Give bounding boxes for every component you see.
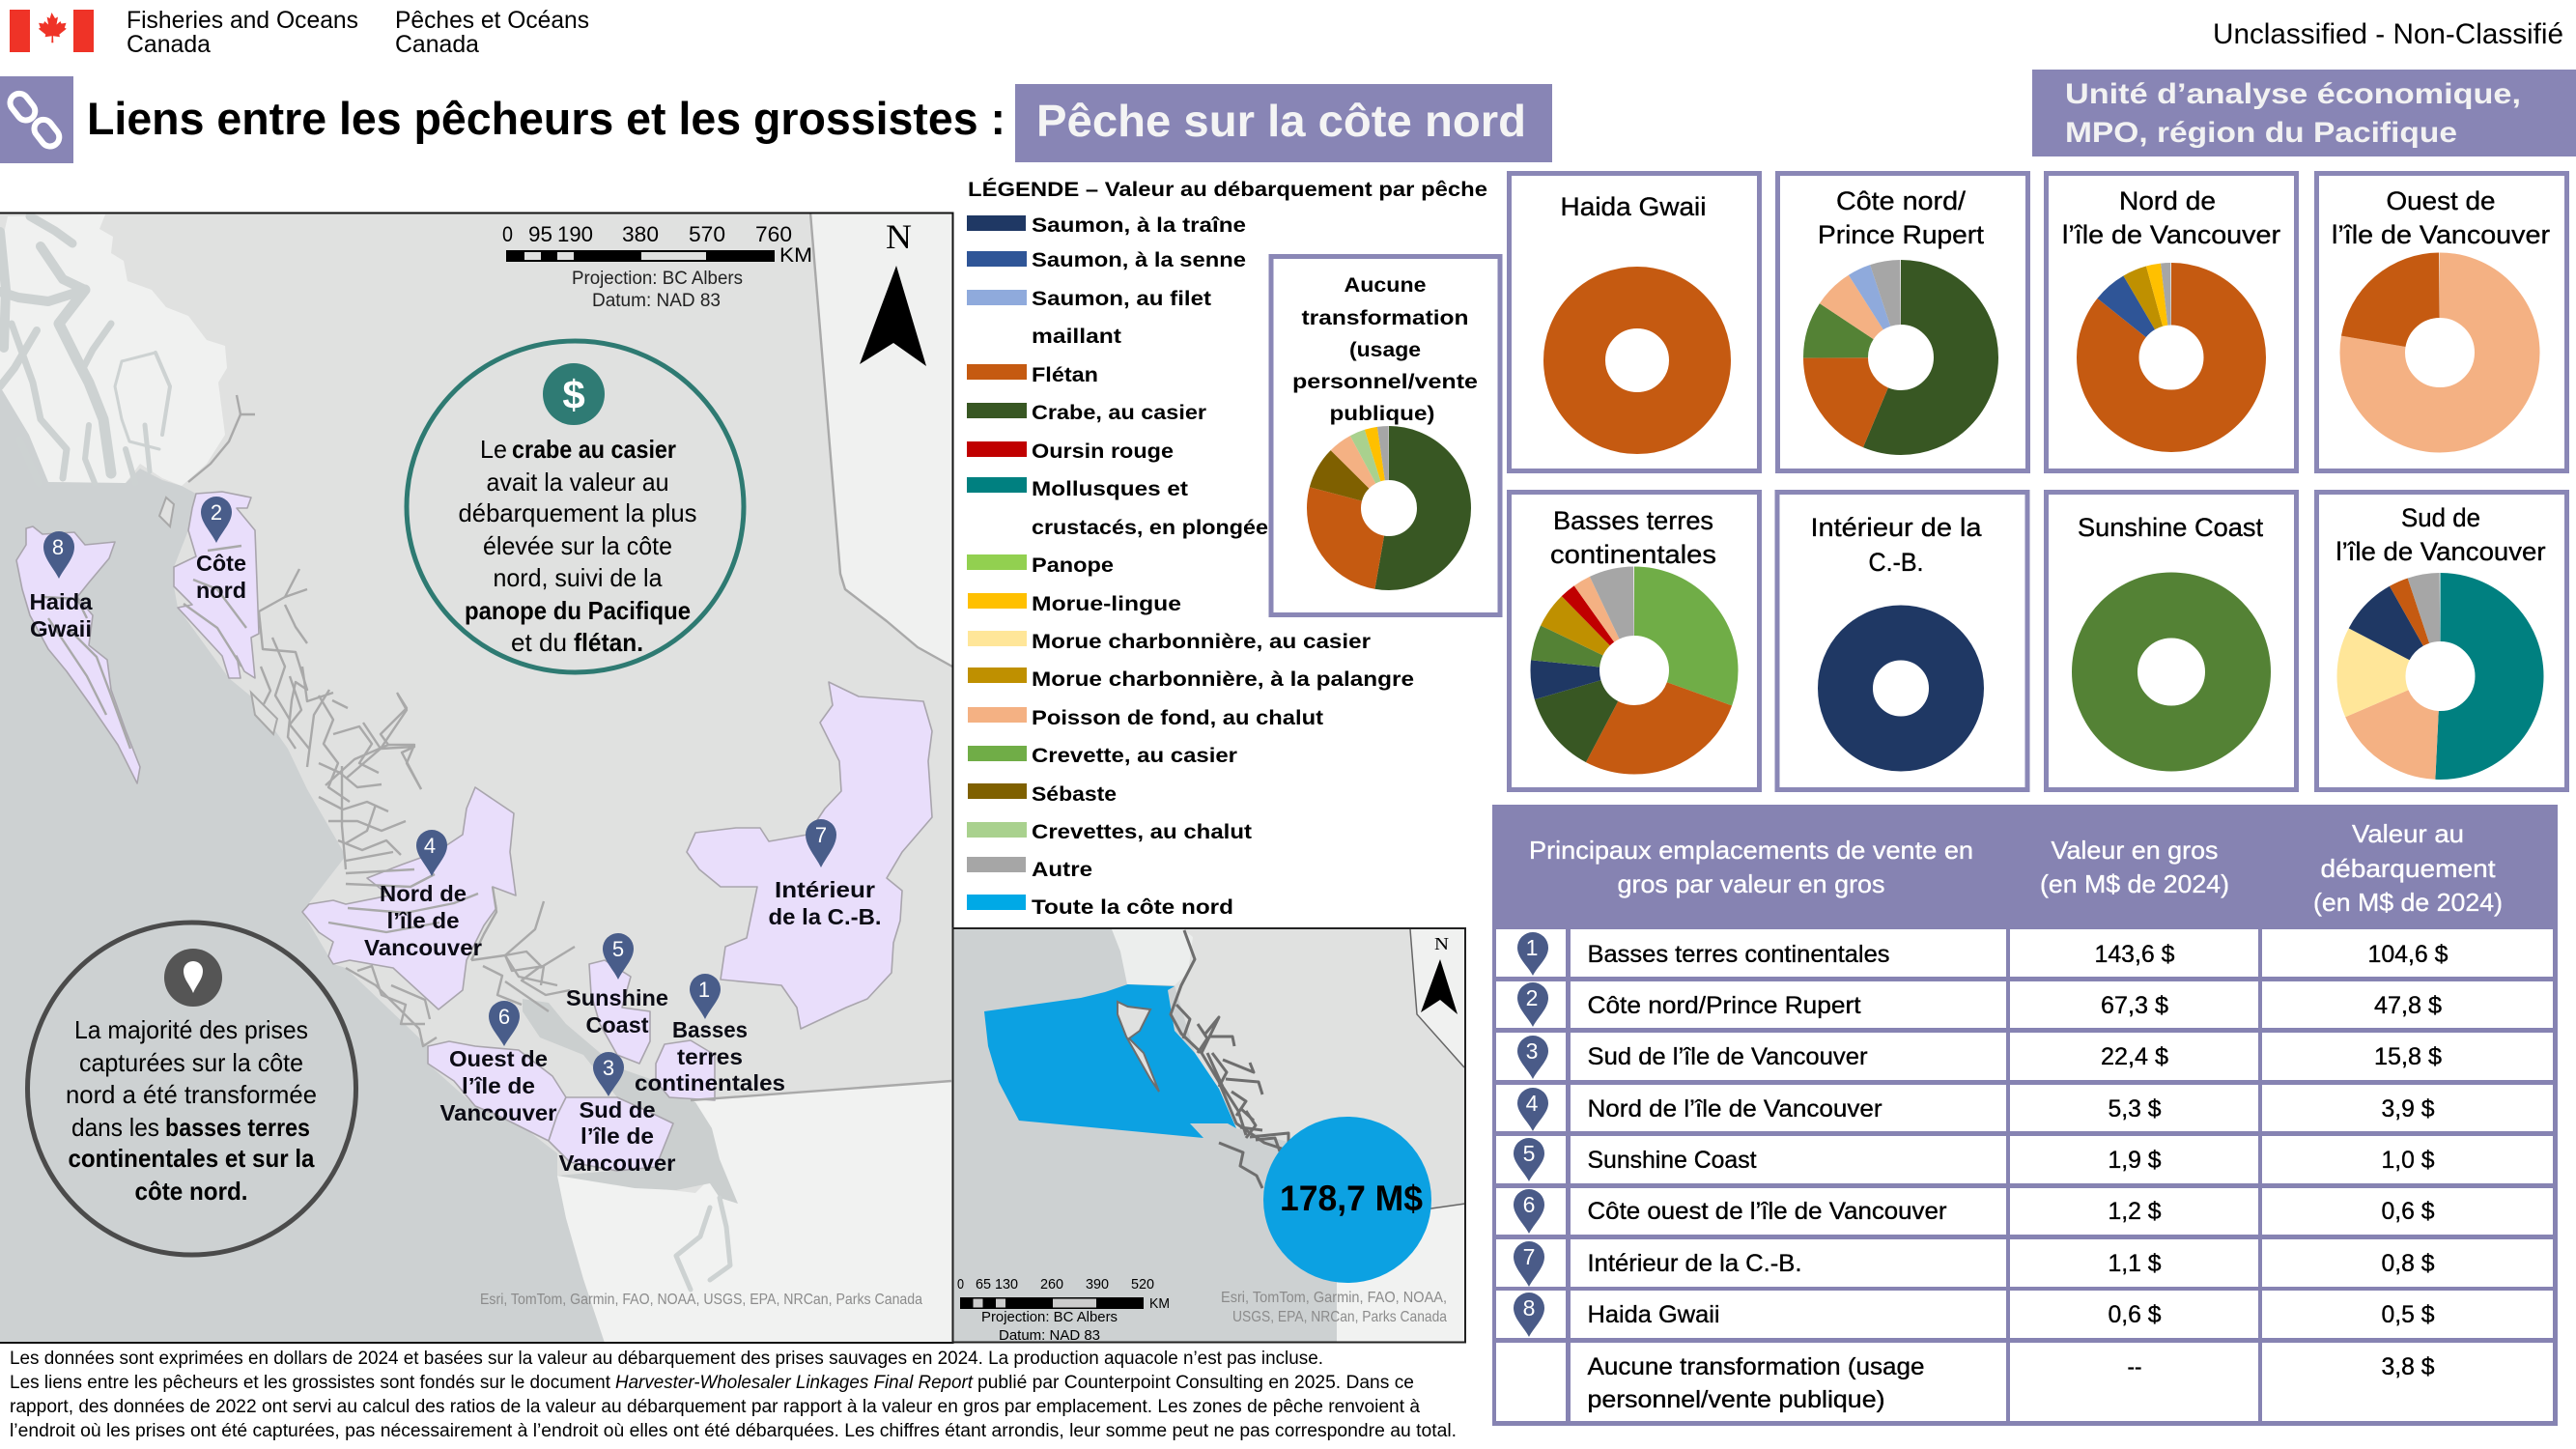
- legend items: Crevette, au casier: [1032, 745, 1237, 767]
- region: Nord de l'île de Vancouver: [302, 787, 516, 1009]
- callout: processing location: basses terres: [165, 1113, 310, 1142]
- subtitle badge: Pêche sur la côte nord: [1036, 96, 1526, 146]
- header: government of Canada signature: Canada: [395, 31, 479, 58]
- row 9: 3,8 $: [2382, 1353, 2435, 1380]
- north arrow: N: [886, 217, 912, 256]
- inset: northern light land: [1112, 929, 1193, 985]
- row 5: 1,9 $: [2108, 1147, 2162, 1174]
- row 2: 67,3 $: [2101, 992, 2168, 1019]
- table header: Principaux emplacements de vente en: [1529, 836, 1973, 865]
- callout: total value: 178,7 M$: [1280, 1179, 1423, 1218]
- inset scale bar: 520: [1131, 1276, 1154, 1293]
- panel: pie Sud de l'île de Vancouver: l’île de Vancouver: [2335, 537, 2546, 566]
- header: government of Canada signature: Pêches et Océans: [395, 7, 589, 34]
- inset scale bar: 0: [957, 1276, 964, 1293]
- inset scale bar: KM: [1149, 1295, 1170, 1312]
- row 1: Basses terres continentales: [1588, 941, 1889, 968]
- row 1: 1: [1526, 935, 1538, 960]
- donut chart: [2372, 285, 2507, 420]
- pin 5 Sunshine Coast: [566, 933, 668, 1037]
- callout: processing location: côte nord.: [135, 1177, 247, 1206]
- inset scale bar: 65: [976, 1276, 991, 1293]
- callout: highest landed value: crabe au casier: [512, 435, 676, 464]
- panel: pie Nord de l'île de Vancouver: l’île de Vancouver: [2062, 220, 2280, 249]
- panel: pie Ouest de l'île de Vancouver: Ouest de: [2386, 186, 2496, 215]
- panel: pie Nord de l'île de Vancouver: Nord de: [2119, 186, 2216, 215]
- legend items: Saumon, à la traîne: [1032, 214, 1246, 237]
- callout: highest landed value: [407, 341, 744, 672]
- callout: total value: [1263, 1117, 1431, 1283]
- legend items: Poisson de fond, au chalut: [1032, 707, 1323, 729]
- row 2: Côte nord/Prince Rupert: [1588, 992, 1861, 1019]
- callout: processing location: continentales et sur la: [68, 1144, 315, 1173]
- inset: Haida Gwaii: [1118, 1002, 1159, 1092]
- icon: dollar: $: [562, 372, 585, 417]
- row 4: 5,3 $: [2108, 1095, 2162, 1122]
- pin 8 Haida Gwaii: [29, 531, 93, 641]
- pin 2 Côte nord: [196, 497, 246, 603]
- footnote: Harvester-Wholesaler Linkages Final Report: [615, 1373, 974, 1393]
- map: Alberta side: [810, 213, 952, 667]
- donut chart: [2108, 294, 2235, 421]
- inset attribution: USGS, EPA, NRCan, Parks Canada: [1232, 1309, 1447, 1325]
- unit badge: Unité d’analyse économique,: [2065, 78, 2521, 110]
- pin 1 Basses terres continentales: [635, 974, 785, 1095]
- callout: highest landed value: avait la valeur au: [487, 468, 668, 497]
- legend items: Toute la côte nord: [1032, 896, 1233, 919]
- icon: dollar: [543, 363, 605, 425]
- panel: pie Intérieur de la C.-B.: [1777, 493, 2027, 790]
- row 5: 5: [1523, 1141, 1535, 1166]
- panel: main map: [0, 213, 952, 1343]
- region: Sunshine Coast: [589, 960, 650, 1064]
- pin 2 Côte nord: Côte: [196, 551, 246, 576]
- panel: legend: [967, 179, 1487, 919]
- donut chart: [2371, 607, 2509, 746]
- scale bar: 570: [689, 222, 725, 246]
- table header: gros par valeur en gros: [1617, 869, 1885, 898]
- map labels and pins: [29, 497, 881, 1176]
- pin 8 Haida Gwaii: 8: [52, 535, 64, 559]
- footnote: rapport, des données de 2022 ont servi au calcul des ratios de la valeur au débarquement par rapport à la valeur en gros par emplacement. Les zones de pêche renvoient à: [10, 1397, 1420, 1417]
- row 6: 6: [1523, 1192, 1535, 1217]
- panel: pie Côte nord / Prince Rupert: [1777, 174, 2028, 471]
- pin 6 Ouest de l'île de Vancouver: Vancouver: [440, 1100, 557, 1125]
- map: ocean: [0, 386, 605, 1343]
- callout: highest landed value: élevée sur la côte: [483, 531, 672, 560]
- row 3: Sud de l’île de Vancouver: [1588, 1043, 1868, 1070]
- inset north arrow: N: [1434, 934, 1449, 953]
- unit badge: MPO, région du Pacifique: [2065, 117, 2457, 149]
- panel: pie aucune transformation: transformation: [1302, 307, 1468, 329]
- donut chart: [1845, 633, 1957, 744]
- legend items: Morue charbonnière, au casier: [1032, 631, 1371, 653]
- subtitle badge: [1015, 84, 1552, 162]
- row 9: [1588, 1353, 2435, 1413]
- panel: pie Nord de l'île de Vancouver: [2046, 174, 2297, 471]
- legend items: Flétan: [1032, 364, 1098, 386]
- panel: pie aucune transformation: personnel/vente: [1292, 371, 1478, 393]
- scale bar: 760: [755, 222, 792, 246]
- legend title: LÉGENDE – Valeur au débarquement par pêche: [968, 179, 1487, 201]
- callout: processing location: capturées sur la côte: [79, 1048, 303, 1077]
- pin 4 Nord de l'île de Vancouver: [364, 830, 482, 960]
- region: Ouest de l'île de Vancouver: [428, 1041, 566, 1141]
- row 3: 15,8 $: [2374, 1043, 2442, 1070]
- panel: pie Sunshine Coast: Sunshine Coast: [2078, 513, 2263, 542]
- callout: highest landed value: nord, suivi de la: [493, 563, 663, 592]
- icon: chain link tile: [0, 76, 73, 163]
- table cell backgrounds: [1496, 929, 2553, 1421]
- panel: pie Sud de l'île de Vancouver: [2316, 493, 2567, 790]
- row 4: 3,9 $: [2382, 1095, 2435, 1122]
- row 4: Nord de l’île de Vancouver: [1588, 1095, 1882, 1122]
- map: Alaska channels: [0, 216, 170, 483]
- scale bar: 0: [502, 222, 513, 246]
- scale bar: Projection: BC Albers: [572, 269, 743, 289]
- title: Liens entre les pêcheurs et les grossistes :: [87, 93, 1005, 144]
- row 1: [1517, 932, 2449, 976]
- footnote: Les données sont exprimées en dollars de 2024 et basées sur la valeur au débarquement des prises sauvages en 2024. La production aquacole n’est pas incluse.: [10, 1349, 1323, 1369]
- legend items: Crevettes, au chalut: [1032, 821, 1252, 843]
- row 3: [1517, 1036, 2442, 1079]
- map: fjords and coastline: [43, 213, 952, 1100]
- callout: highest landed value: et du: [511, 628, 567, 657]
- callout: processing location: [27, 923, 355, 1255]
- classification label: Unclassified - Non-Classifié: [2213, 18, 2563, 50]
- pin 4 Nord de l'île de Vancouver: l’île de: [386, 908, 460, 933]
- inset scale bar: 390: [1086, 1276, 1109, 1293]
- legend items: Oursin rouge: [1032, 440, 1174, 463]
- pin 6 Ouest de l'île de Vancouver: [440, 1001, 557, 1125]
- inset scale bar: Projection: BC Albers: [981, 1309, 1118, 1325]
- panel: pie Côte nord / Prince Rupert: Côte nord/: [1836, 186, 1967, 215]
- map: Puget Sound: [676, 1198, 730, 1290]
- footnote: publié par Counterpoint Consulting en 2025. Dans ce: [977, 1373, 1414, 1393]
- panel: pie Haida Gwaii: [1509, 174, 1760, 471]
- legend items: Morue charbonnière, à la palangre: [1032, 668, 1414, 691]
- footnote: l’endroit où les prises ont été capturées, pas nécessairement à l’endroit où elles ont été débarquées. Les chiffres étant arrondis, leur somme peut ne pas correspondre au total.: [10, 1421, 1457, 1441]
- pin 5 Sunshine Coast: Coast: [585, 1012, 649, 1037]
- panel: pie Sunshine Coast: [2046, 493, 2297, 790]
- table header: débarquement: [2320, 854, 2496, 883]
- pin 4 Nord de l'île de Vancouver: Nord de: [380, 881, 467, 906]
- pin 6 Ouest de l'île de Vancouver: l’île de: [462, 1073, 535, 1098]
- pin 1 Basses terres continentales: terres: [677, 1044, 743, 1069]
- row 6: 0,6 $: [2382, 1198, 2435, 1225]
- inset: north coast fishing area: [984, 984, 1236, 1138]
- panel: pie aucune transformation: [1271, 257, 1500, 614]
- row 6: 1,2 $: [2108, 1198, 2162, 1225]
- legend items: Mollusques et: [1032, 478, 1188, 500]
- panel: pie aucune transformation: Aucune: [1345, 274, 1426, 297]
- pin 8 Haida Gwaii: Haida: [29, 589, 93, 614]
- footnote: [10, 1349, 1457, 1441]
- callout: processing location: nord a été transformée: [66, 1080, 317, 1109]
- icon: location pin: [164, 949, 222, 1007]
- panel: inset map total value: [952, 928, 1465, 1344]
- legend items: Crabe, au casier: [1032, 402, 1206, 424]
- inset attribution: Esri, TomTom, Garmin, FAO, NOAA,: [1221, 1290, 1447, 1306]
- row 1: 143,6 $: [2094, 941, 2175, 968]
- row 2: 2: [1526, 985, 1538, 1010]
- pin 7 Intérieur de la C.-B.: [769, 819, 881, 929]
- pin 2 Côte nord: nord: [196, 578, 246, 603]
- table header: [1529, 819, 2503, 917]
- pin 3 Sud de l'île de Vancouver: l’île de: [580, 1123, 654, 1149]
- pin 2 Côte nord: 2: [211, 500, 222, 525]
- callout: processing location: dans les: [71, 1113, 159, 1142]
- map attribution: Esri, TomTom, Garmin, FAO, NOAA, USGS, EPA, NRCan, Parks Canada: [480, 1292, 922, 1308]
- inset scale bar: [957, 1276, 1170, 1344]
- row 9: --: [2127, 1353, 2142, 1380]
- panel: pie Intérieur de la C.-B.: C.-B.: [1868, 548, 1924, 577]
- region: Côte nord: [174, 492, 259, 678]
- icon: Canadian flag: [10, 10, 94, 52]
- unit badge: [2032, 70, 2576, 156]
- inset: coastline: [1171, 929, 1465, 1222]
- row 7: [1514, 1241, 2435, 1287]
- row 5: Sunshine Coast: [1588, 1147, 1757, 1174]
- table header: (en M$ de 2024): [2040, 869, 2229, 898]
- row 8: 0,6 $: [2108, 1301, 2162, 1328]
- pin 7 Intérieur de la C.-B.: de la C.-B.: [769, 904, 881, 929]
- inset: United States: [1337, 1204, 1465, 1342]
- panel: pie aucune transformation: publique): [1329, 403, 1435, 425]
- footnote: Les liens entre les pêcheurs et les grossistes sont fondés sur le document: [10, 1373, 611, 1393]
- donut chart: [1574, 298, 1700, 423]
- region: Intérieur de la C.-B.: [687, 682, 932, 1029]
- table header: Valeur en gros: [2052, 836, 2218, 865]
- region: Basses terres continentales: [656, 1040, 715, 1100]
- scale bar: Datum: NAD 83: [592, 291, 721, 311]
- row 2: [1517, 982, 2442, 1027]
- header: government of Canada signature: Fisheries and Oceans: [127, 7, 358, 34]
- panel: pie Basses terres continentales: Basses terres: [1553, 506, 1713, 535]
- pin 6 Ouest de l'île de Vancouver: Ouest de: [449, 1046, 548, 1071]
- pin 7 Intérieur de la C.-B.: Intérieur: [775, 877, 875, 902]
- legend items: crustacés, en plongée: [1032, 517, 1268, 539]
- callout: highest landed value: flétan.: [574, 628, 643, 657]
- row 6: [1514, 1189, 2435, 1234]
- callout: highest landed value: débarquement la plus: [458, 498, 697, 527]
- north arrow: [860, 217, 926, 366]
- table: wholesale locations: [1492, 805, 2558, 1426]
- panel: pie Basses terres continentales: [1509, 493, 1760, 790]
- pin 4 Nord de l'île de Vancouver: Vancouver: [364, 935, 482, 960]
- pin 3 Sud de l'île de Vancouver: [558, 1052, 676, 1176]
- row 7: 7: [1523, 1244, 1535, 1269]
- inset scale bar: Datum: NAD 83: [999, 1327, 1100, 1344]
- scale bar: 190: [557, 222, 593, 246]
- inset attribution: [1221, 1290, 1447, 1325]
- row 4: 4: [1526, 1091, 1539, 1116]
- callout: highest landed value: panope du Pacifique: [465, 596, 691, 625]
- row 6: Côte ouest de l’île de Vancouver: [1588, 1198, 1947, 1225]
- region: Sud de l'île de Vancouver: [549, 1097, 673, 1171]
- inset scale bar: 260: [1040, 1276, 1063, 1293]
- map: United States: [557, 1081, 951, 1343]
- panel: pie aucune transformation: (usage: [1349, 339, 1421, 361]
- row 7: 0,8 $: [2382, 1250, 2435, 1277]
- row 3: 22,4 $: [2101, 1043, 2168, 1070]
- inset: ocean: [952, 928, 1337, 1342]
- map frame: [0, 213, 952, 1343]
- row 4: [1517, 1088, 2435, 1131]
- pin 3 Sud de l'île de Vancouver: 3: [603, 1056, 614, 1080]
- row 8: Haida Gwaii: [1588, 1301, 1719, 1328]
- row 3: 3: [1526, 1038, 1538, 1064]
- panel: pie Ouest de l'île de Vancouver: l’île de Vancouver: [2332, 220, 2550, 249]
- panel: pie Côte nord / Prince Rupert: Prince Rupert: [1818, 220, 1985, 249]
- scale bar: 95: [528, 222, 552, 246]
- pin 1 Basses terres continentales: Basses: [672, 1017, 748, 1042]
- map: Strait of Georgia and Juan de Fuca: [523, 999, 738, 1204]
- row 2: 47,8 $: [2374, 992, 2442, 1019]
- pin 1 Basses terres continentales: 1: [698, 978, 710, 1002]
- legend items: Autre: [1032, 859, 1092, 881]
- scale bar: 380: [622, 222, 659, 246]
- pin 5 Sunshine Coast: Sunshine: [566, 985, 668, 1010]
- donut chart: [1565, 601, 1704, 740]
- row 9: Aucune transformation (usage: [1588, 1353, 1924, 1380]
- row 7: 1,1 $: [2108, 1250, 2162, 1277]
- inset scale bar: 130: [995, 1276, 1018, 1293]
- pin 3 Sud de l'île de Vancouver: Sud de: [580, 1097, 655, 1122]
- legend items: [967, 214, 1414, 919]
- donut chart: [1835, 292, 1967, 423]
- callout: processing location: La majorité des prises: [74, 1015, 308, 1044]
- legend items: Sébaste: [1032, 783, 1117, 806]
- legend items: Saumon, à la senne: [1032, 249, 1246, 271]
- donut chart: [2105, 605, 2238, 738]
- donut chart: [1334, 453, 1444, 563]
- panel: pie Intérieur de la C.-B.: Intérieur de la: [1810, 513, 1983, 542]
- inset north arrow: [1421, 934, 1458, 1014]
- table header: (en M$ de 2024): [2313, 888, 2503, 917]
- region: Haida Gwaii: [16, 526, 140, 783]
- pin 7 Intérieur de la C.-B.: 7: [815, 823, 827, 847]
- legend items: maillant: [1032, 326, 1121, 348]
- legend items: Morue-lingue: [1032, 593, 1181, 615]
- row 8: 8: [1523, 1295, 1535, 1321]
- legend items: Saumon, au filet: [1032, 288, 1211, 310]
- map: Alaska panhandle: [0, 214, 227, 486]
- row 7: Intérieur de la C.-B.: [1588, 1250, 1802, 1277]
- pin 5 Sunshine Coast: 5: [612, 937, 624, 961]
- inset: Alberta: [1410, 929, 1465, 1067]
- pin 3 Sud de l'île de Vancouver: Vancouver: [558, 1151, 676, 1176]
- row 8: 0,5 $: [2382, 1301, 2435, 1328]
- panel: pie Haida Gwaii: Haida Gwaii: [1561, 192, 1706, 221]
- pin 1 Basses terres continentales: continentales: [635, 1070, 785, 1095]
- panel: pie Sud de l'île de Vancouver: Sud de: [2401, 503, 2480, 532]
- header: government of Canada signature: [10, 7, 589, 58]
- row 5: 1,0 $: [2382, 1147, 2435, 1174]
- scale bar: KM: [779, 244, 812, 267]
- row 1: 104,6 $: [2368, 941, 2449, 968]
- row 5: [1514, 1138, 2435, 1181]
- table header: Valeur au: [2352, 819, 2464, 848]
- callout: highest landed value: Le: [480, 435, 507, 464]
- legend items: Panope: [1032, 554, 1114, 577]
- row 9: personnel/vente publique): [1588, 1386, 1885, 1413]
- row 8: [1514, 1293, 2435, 1337]
- panel: pie Basses terres continentales: continentales: [1550, 540, 1716, 569]
- pin 4 Nord de l'île de Vancouver: 4: [424, 834, 436, 858]
- pin 8 Haida Gwaii: Gwaii: [30, 616, 92, 641]
- scale bar: [502, 222, 812, 311]
- pin 6 Ouest de l'île de Vancouver: 6: [498, 1005, 510, 1029]
- panel: pie Ouest de l'île de Vancouver: [2316, 174, 2567, 471]
- header: government of Canada signature: Canada: [127, 31, 211, 58]
